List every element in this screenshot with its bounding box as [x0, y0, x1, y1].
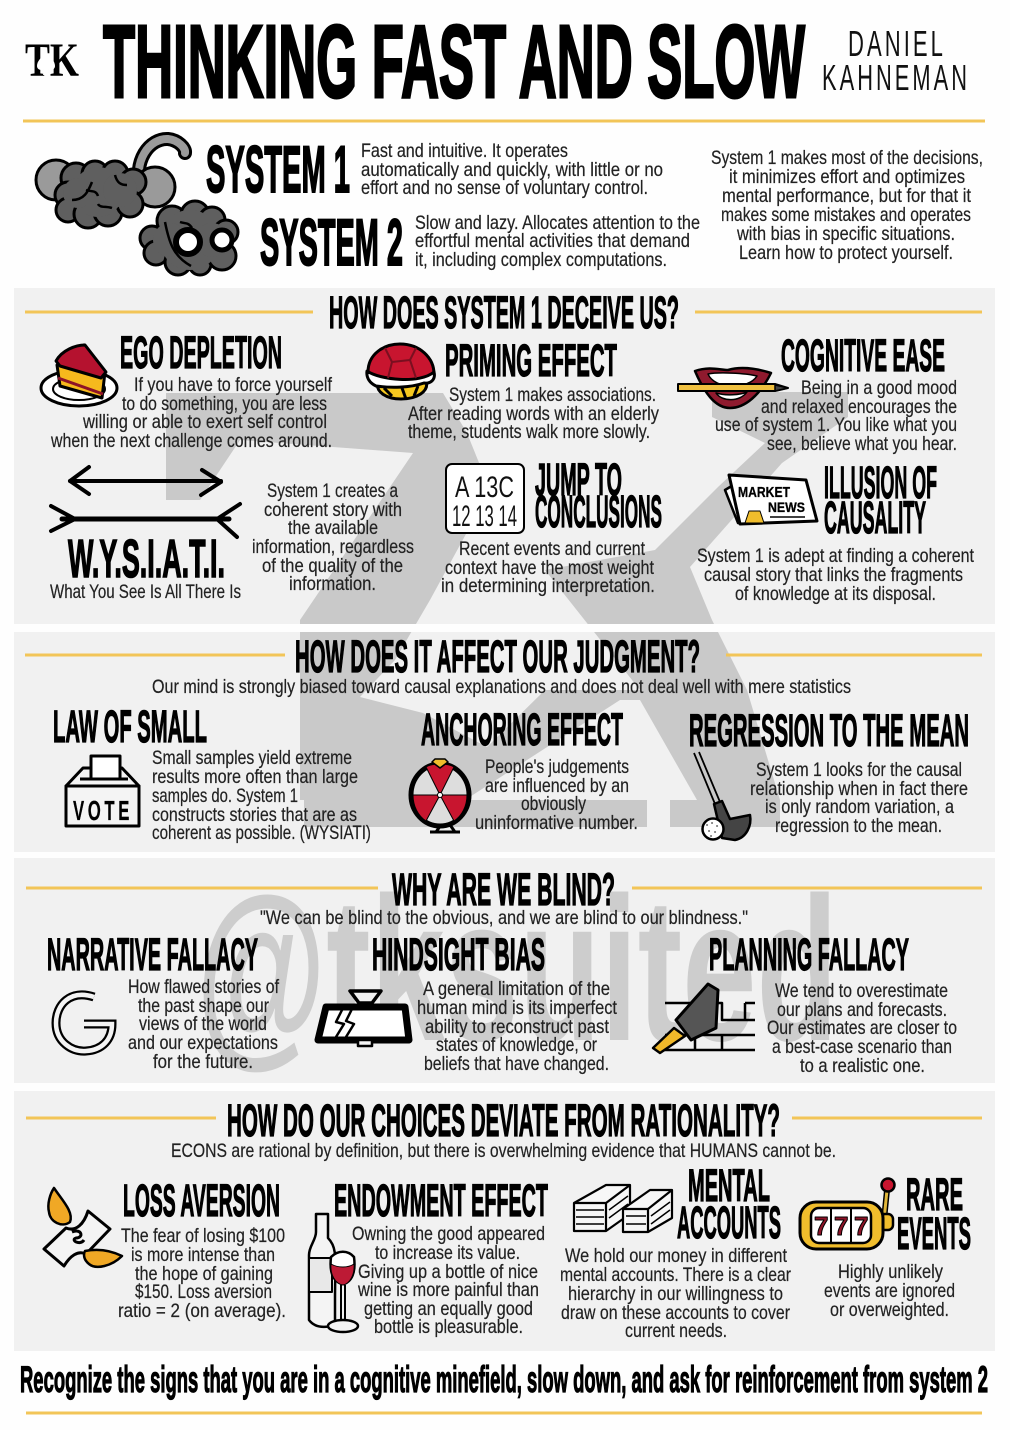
systems intro: SYSTEM 2 [260, 205, 403, 279]
text: anchoring effect: uninformative number. [475, 812, 638, 834]
text: priming effect [408, 384, 659, 443]
text: loss aversion: $150. Loss aversion [135, 1281, 272, 1303]
text: system 1 description: automatically and quickly, with little or no [361, 159, 663, 181]
text: cognitive ease: see, believe what you hear. [767, 433, 957, 455]
text: hindsight bias [417, 978, 617, 1075]
text: jump to conclusions: context have the most weight [445, 557, 654, 579]
text: priming effect: System 1 makes associations. [449, 384, 656, 406]
block: anchoring effect [411, 704, 638, 834]
section heading 3: WHY ARE WE BLIND? [392, 864, 615, 915]
heading: illusion of causality [824, 457, 937, 543]
text: law of small: results more often than large [152, 766, 358, 788]
text: law of small: constructs stories that are as [152, 804, 357, 826]
text: narrative fallacy: views of the world [139, 1013, 267, 1035]
text: narrative fallacy: How flawed stories of [128, 976, 279, 998]
text: rare events: or overweighted. [830, 1299, 949, 1321]
text: hindsight bias: beliefs that have changed. [424, 1053, 609, 1075]
text: system 1 description [361, 140, 663, 199]
block: priming effect: PRIMING EFFECT [445, 335, 617, 386]
icon: golf club and ball [694, 752, 750, 840]
panel: how does system 1 deceive us [14, 287, 995, 624]
icon: vote box: VOTE [73, 795, 133, 826]
block: narrative fallacy [47, 929, 279, 1073]
text: system 2 description: it, including complex computations. [415, 249, 667, 271]
text: planning fallacy: We tend to overestimate [775, 980, 948, 1002]
text: endowment effect [352, 1223, 545, 1338]
text: system overview: it minimizes effort and optimizes [729, 166, 965, 188]
text: mental accounts: current needs. [625, 1320, 727, 1342]
icon: lips holding pencil [678, 368, 788, 408]
icon: cracked rear-view mirror [318, 991, 409, 1046]
heading: rare events [897, 1169, 971, 1259]
block: law of small [53, 701, 371, 844]
block: jump to conclusions [441, 454, 662, 597]
text: endowment effect: wine is more painful than [357, 1279, 539, 1301]
panel backgrounds [14, 288, 995, 1351]
text: loss aversion: is more intense than [131, 1244, 275, 1266]
block: regression to the mean [689, 705, 969, 840]
text: ego depletion: when the next challenge comes around. [50, 430, 332, 452]
panel: how do our choices deviate from rationality: ACCOUNTS [677, 1197, 781, 1248]
text: law of small: samples do. System 1 [152, 785, 298, 807]
icon: market news newspaper [725, 475, 817, 524]
text: system overview: with bias in specific situations. [736, 223, 955, 245]
text: wysiati: the available [288, 517, 378, 539]
text: regression to the mean: System 1 looks for the causal [756, 759, 962, 781]
text: system overview: mental performance, but for that it [722, 185, 971, 207]
text: mental accounts: hierarchy in our willingness to [568, 1283, 783, 1305]
block: ego depletion: EGO DEPLETION [120, 327, 282, 378]
text: system 2 description: effortful mental activities that demand [415, 230, 690, 252]
text: mental accounts [560, 1245, 791, 1342]
section heading 3 [26, 864, 982, 915]
text: rare events: Highly unlikely [838, 1261, 943, 1283]
panel: why are we blind: NARRATIVE FALLACY [47, 929, 258, 980]
text: wysiati: information. [289, 573, 376, 595]
text: hindsight bias: human mind is its imperfect [417, 997, 617, 1019]
icon: Google G [56, 995, 112, 1051]
text: illusion of causality [697, 545, 974, 605]
text: jump to conclusions: Recent events and current [459, 538, 645, 560]
text: anchoring effect [475, 756, 638, 834]
text: cognitive ease: Being in a good mood [801, 377, 957, 399]
text: wysiati: information, regardless [252, 536, 414, 558]
text: wysiati: coherent story with [264, 499, 402, 521]
text: wysiati: System 1 creates a [267, 480, 398, 502]
heading: mental accounts: MENTAL [688, 1160, 770, 1211]
block: hindsight bias: HINDSIGHT BIAS [372, 929, 545, 980]
block: endowment effect [309, 1175, 548, 1338]
text: endowment effect: to increase its value. [375, 1242, 520, 1264]
panel: why are we blind [14, 858, 995, 1083]
author: DANIEL [848, 23, 946, 64]
text: section 4 intro: ECONS are rational by definition, but there is overwhelming evidence that HUMANS cannot be. [171, 1140, 836, 1162]
text: loss aversion: The fear of losing $100 [121, 1225, 285, 1247]
text: endowment effect: getting an equally good [364, 1298, 533, 1320]
text: anchoring effect: are influenced by an [485, 775, 629, 797]
text: illusion of causality: causal story that links the fragments [704, 564, 963, 586]
block: illusion of causality [697, 457, 974, 605]
block: planning fallacy [653, 929, 957, 1077]
block: wysiati: W.Y.S.I.A.T.I. [68, 529, 225, 589]
icon: brain system 1 [36, 139, 185, 228]
text: ego depletion: If you have to force yourself [134, 374, 332, 396]
text: mental accounts: mental accounts. There is a clear [560, 1264, 791, 1286]
text: loss aversion: the hope of gaining [135, 1263, 273, 1285]
text: loss aversion: ratio = 2 (on average). [118, 1300, 286, 1322]
logo: TK with spade: TK [25, 34, 79, 87]
panel: how does it affect our judgment [14, 631, 995, 852]
watermark: TK logo and handle [166, 392, 848, 1084]
block: law of small: LAW OF SMALL [53, 701, 207, 752]
text: endowment effect: bottle is pleasurable. [374, 1316, 523, 1338]
text: planning fallacy: a best-case scenario than [772, 1036, 952, 1058]
block: wysiati [50, 467, 414, 603]
text: priming effect: After reading words with an elderly [408, 403, 659, 425]
panel: how does system 1 deceive us: CONCLUSIONS [535, 486, 662, 537]
icon: ABC 12 13 14 card: A 13C [455, 471, 514, 504]
block: hindsight bias [318, 929, 617, 1075]
icon: ABC 12 13 14 card: 12 13 14 [452, 500, 517, 533]
text: hindsight bias: A general limitation of the [423, 978, 610, 1000]
text: system 1 description: effort and no sense of voluntary control. [361, 177, 648, 199]
text: rare events: events are ignored [824, 1280, 955, 1302]
text: illusion of causality: of knowledge at its disposal. [735, 583, 936, 605]
text: law of small: coherent as possible. (WYSIATI) [152, 822, 371, 844]
block: ego depletion [41, 327, 332, 452]
block: rare events [800, 1169, 971, 1321]
text: jump to conclusions: in determining interpretation. [441, 575, 655, 597]
icon: slot machine: 7 [834, 1211, 848, 1241]
block: mental accounts [560, 1160, 791, 1342]
icon: Muller-Lyer arrows [51, 467, 240, 537]
text: narrative fallacy [128, 976, 279, 1073]
text: law of small [152, 747, 371, 844]
text: mental accounts: We hold our money in different [565, 1245, 787, 1267]
text: anchoring effect: People's judgements [485, 756, 629, 778]
author [822, 23, 970, 98]
text: wysiati expansion: What You See Is All There Is [50, 581, 241, 603]
icon: money stacks [574, 1185, 672, 1232]
icon: slot machine: 7 [814, 1211, 828, 1241]
icon: vote box [66, 756, 139, 826]
text: ego depletion [50, 374, 332, 452]
text: regression to the mean: relationship when in fact there [750, 778, 968, 800]
text: priming effect: theme, students walk more slowly. [408, 421, 650, 443]
panel: how do our choices deviate from rationality [14, 1091, 995, 1351]
text: planning fallacy: our plans and forecasts. [777, 999, 947, 1021]
text: ego depletion: willing or able to exert self control [82, 411, 327, 433]
text: regression to the mean: regression to the mean. [775, 815, 942, 837]
text: section 2 intro: Our mind is strongly biased toward causal explanations and does not deal well with mere statistics [152, 676, 851, 698]
text: wysiati: of the quality of the [262, 555, 403, 577]
text: ego depletion: to do something, you are less [122, 393, 327, 415]
icon: turtle shell [367, 344, 434, 399]
text: anchoring effect: obviously [521, 793, 586, 815]
text: planning fallacy: Our estimates are closer to [767, 1017, 957, 1039]
text: system 2 description: Slow and lazy. Allocates attention to the [415, 212, 700, 234]
text: cognitive ease [715, 377, 957, 455]
header [25, 4, 970, 119]
icon: slot machine: 7 [854, 1211, 868, 1241]
text: regression to the mean [750, 759, 968, 837]
icon: wine bottle and glass [309, 1214, 358, 1332]
text: system 1 description: Fast and intuitive. It operates [361, 140, 568, 162]
icon: prize wheel [411, 759, 469, 832]
systems intro: SYSTEM 1 [206, 132, 350, 206]
panel: how do our choices deviate from rationality: ENDOWMENT EFFECT [334, 1175, 548, 1226]
section heading 2 [25, 631, 982, 682]
text: narrative fallacy: for the future. [153, 1051, 253, 1073]
text: mental accounts: draw on these accounts to cover [561, 1302, 790, 1324]
text: wysiati [252, 480, 414, 595]
text: jump to conclusions [441, 538, 655, 597]
text: quote: "We can be blind to the obvious, and we are blind to our blindness." [260, 907, 748, 929]
icon: slot machine [800, 1178, 894, 1249]
text: endowment effect: Giving up a bottle of nice [358, 1261, 538, 1283]
text: system 2 description [415, 212, 700, 271]
text: rare events [824, 1261, 955, 1321]
icon: flying money [44, 1188, 122, 1267]
text: law of small: Small samples yield extreme [152, 747, 352, 769]
icon: market news newspaper: NEWS [768, 499, 805, 515]
text: planning fallacy [767, 980, 957, 1077]
icon: trowel and bricks [653, 984, 755, 1053]
block: cognitive ease [678, 330, 957, 455]
text: regression to the mean: is only random variation, a [765, 796, 954, 818]
systems intro [36, 132, 983, 279]
heading: jump to conclusions [535, 454, 662, 537]
icon: market news newspaper: MARKET [738, 484, 790, 501]
text: hindsight bias: states of knowledge, or [436, 1034, 597, 1056]
text: hindsight bias: ability to reconstruct past [425, 1016, 609, 1038]
icon: cake [41, 345, 117, 406]
heading: jump to conclusions: JUMP TO [535, 454, 622, 505]
icon: ABC 12 13 14 card [446, 464, 524, 533]
text: system overview: Learn how to protect yourself. [739, 242, 953, 264]
icon: brain system 2 [140, 201, 238, 275]
heading: mental accounts [677, 1160, 781, 1248]
text: endowment effect: Owning the good appeared [352, 1223, 545, 1245]
text: loss aversion [118, 1225, 286, 1322]
block: loss aversion [44, 1175, 286, 1322]
text: planning fallacy: to a realistic one. [800, 1055, 925, 1077]
panel: how do our choices deviate from rationality: LOSS AVERSION [123, 1175, 280, 1226]
text: narrative fallacy: the past shape our [138, 995, 269, 1017]
text: narrative fallacy: and our expectations [128, 1032, 278, 1054]
text: cognitive ease: use of system 1. You like what you [715, 414, 957, 436]
section heading 1 [25, 287, 982, 338]
text: system overview [711, 147, 983, 264]
block: priming effect [367, 335, 659, 443]
panel: how does it affect our judgment: ANCHORING EFFECT [421, 704, 623, 755]
text: cognitive ease: and relaxed encourages the [761, 396, 957, 418]
